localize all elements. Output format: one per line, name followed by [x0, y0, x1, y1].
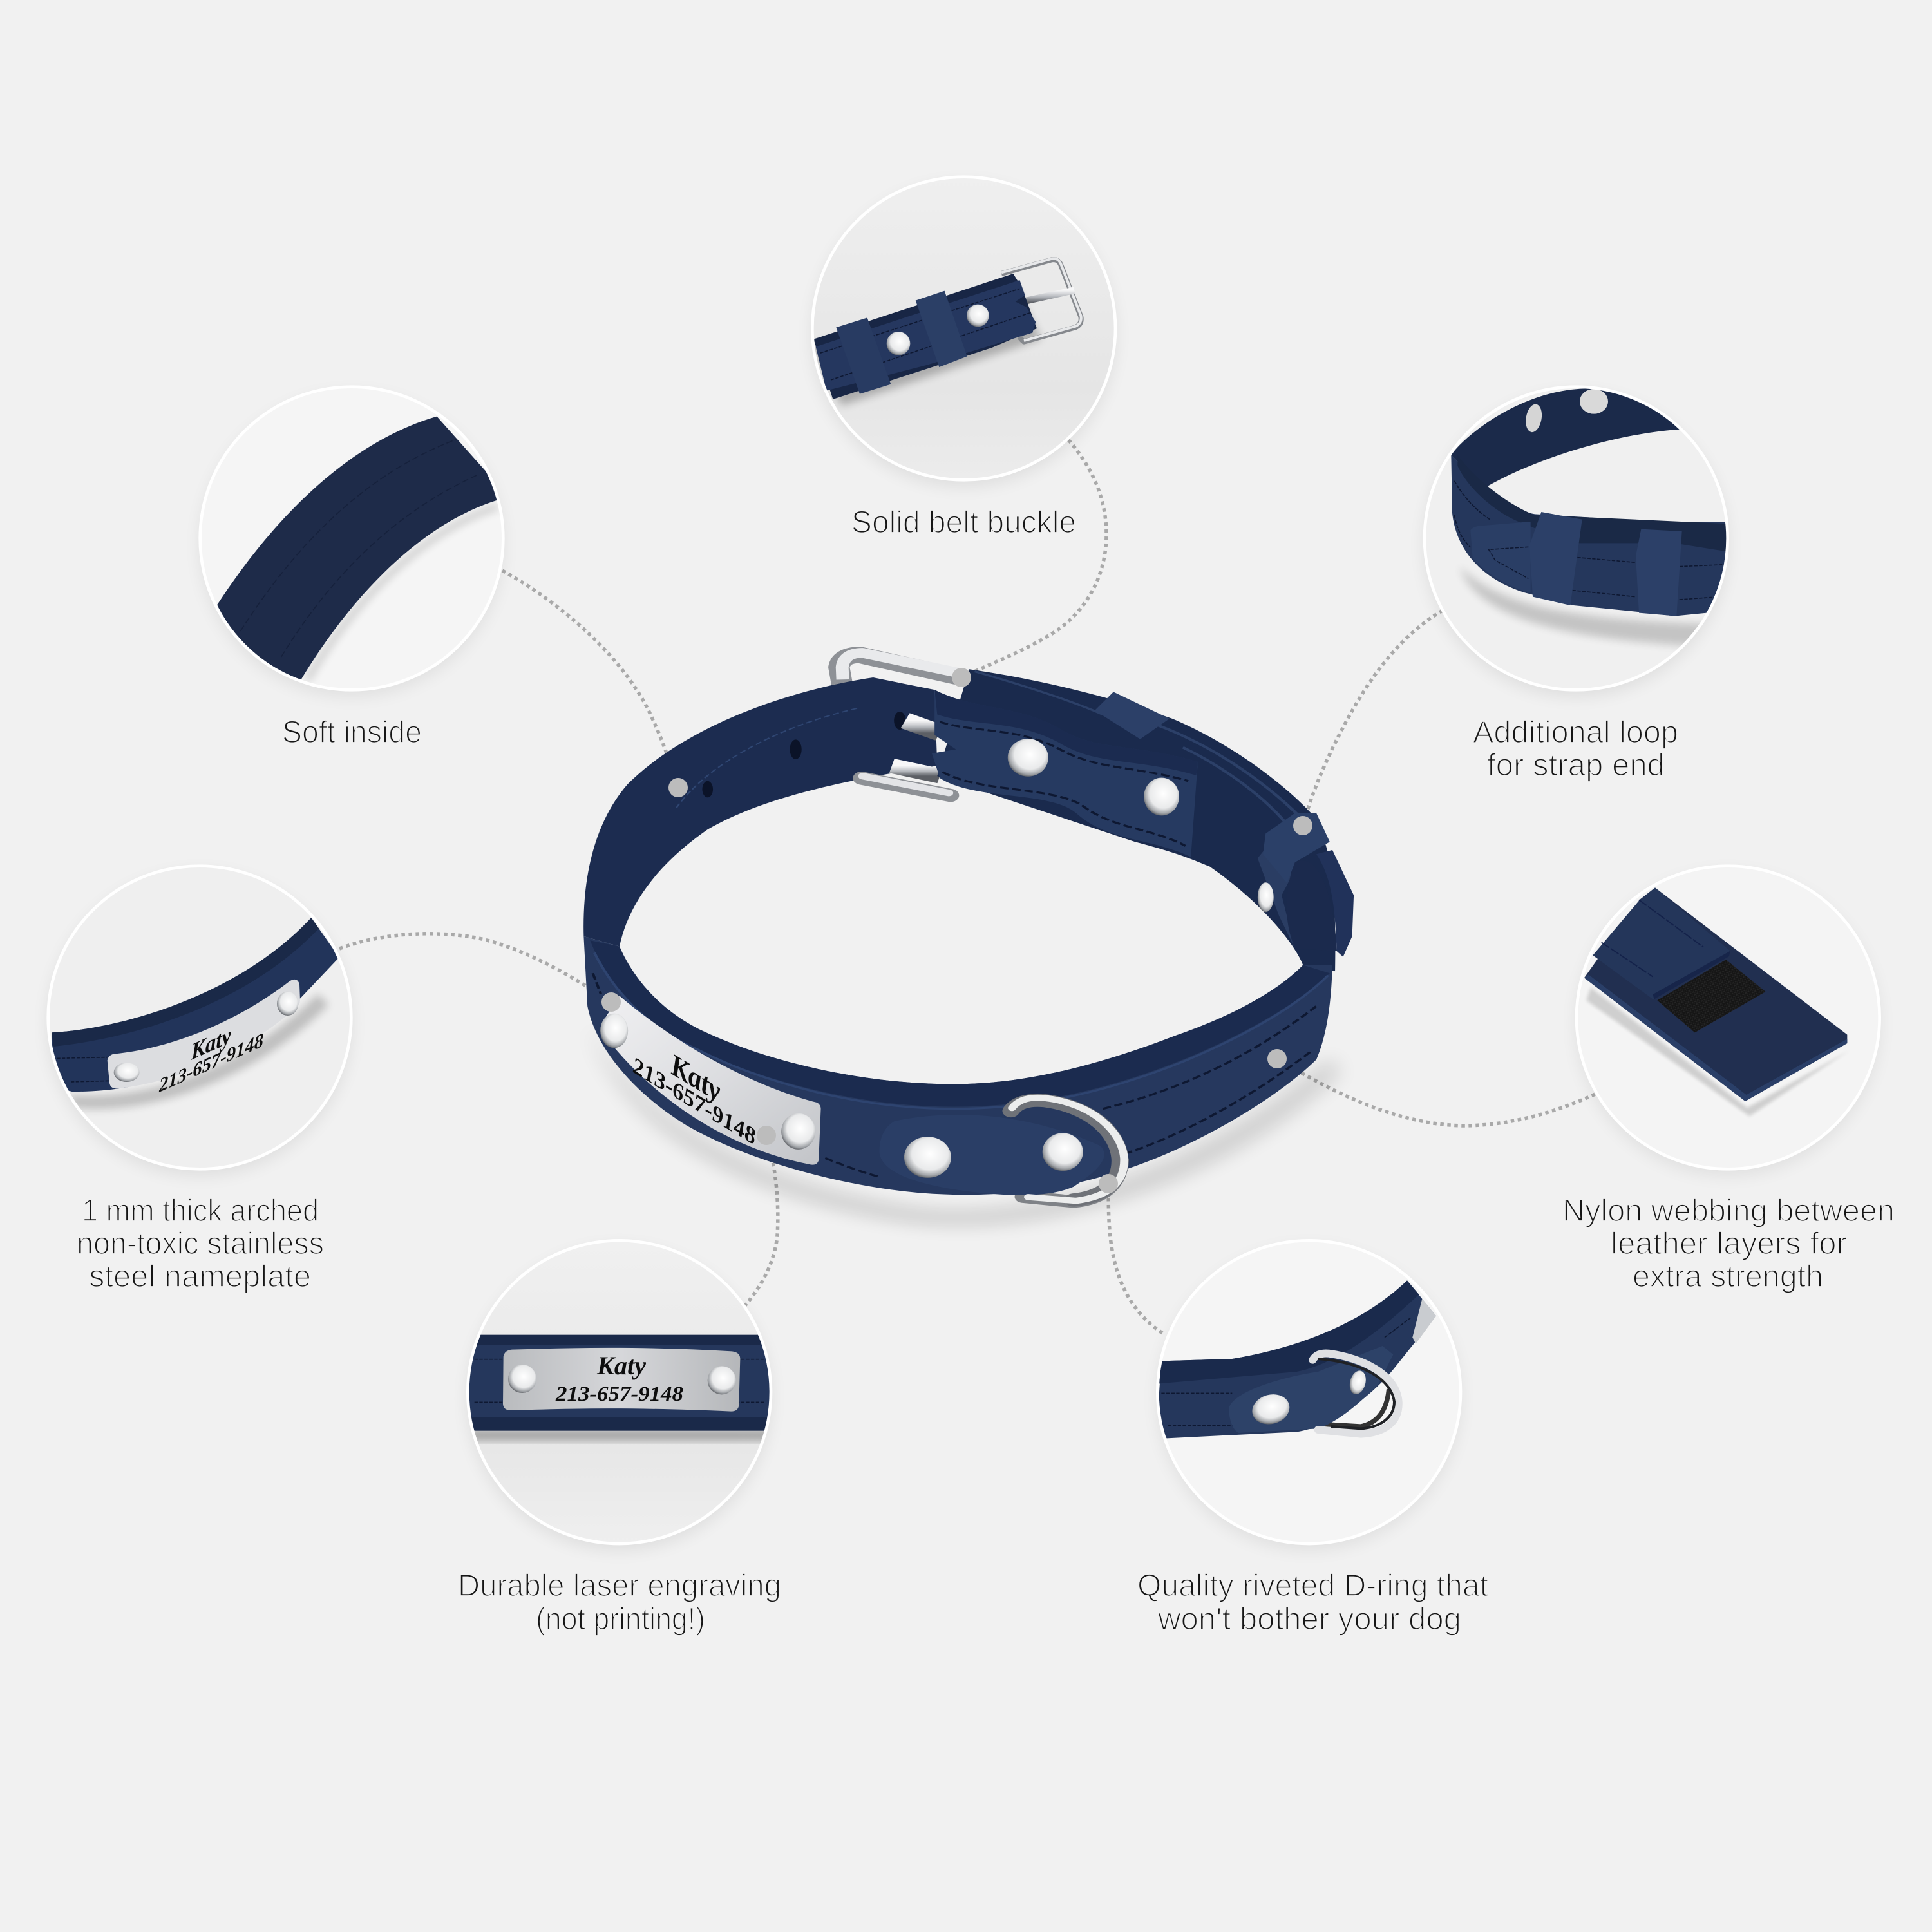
strap holes: [702, 712, 905, 797]
stitching: [1454, 481, 1726, 600]
leader line: additional loop: [1303, 611, 1443, 826]
label: nylon webbing: [1562, 1194, 1895, 1294]
panel: riveted D-ring: [1157, 1240, 1461, 1550]
buckle prong and lower bar: [862, 721, 951, 795]
stainless steel nameplate: [603, 996, 821, 1165]
nameplate engraving: Katy: [670, 1045, 721, 1110]
buckle tab rivets: [1008, 739, 1179, 815]
label: nylon webbing: Nylon webbing between: [1562, 1194, 1895, 1228]
buckle prong: [1018, 290, 1074, 303]
panel: arched nameplate: [48, 866, 351, 1175]
label: soft inside: Soft inside: [282, 715, 422, 750]
buckle strap: [813, 274, 1037, 399]
suede stitching: [240, 439, 457, 631]
buckle back frame: [839, 653, 961, 685]
collar shadow: [590, 1023, 1338, 1226]
stitching: [1161, 1392, 1232, 1395]
rivets: [887, 332, 910, 355]
suede top edge: [52, 918, 319, 1046]
D-ring: [1011, 1098, 1124, 1201]
strap base: [1584, 887, 1847, 1101]
arched nameplate engraving: 213-657-9148: [158, 1028, 263, 1097]
label: nameplate: non-toxic stainless: [77, 1227, 324, 1261]
tab rivets: [904, 1133, 1083, 1178]
rivets: [508, 1365, 536, 1393]
suede strap with holes: [1451, 388, 1683, 488]
nameplate corner: [1412, 1299, 1436, 1344]
leader line: nylon webbing: [1277, 1059, 1595, 1126]
suede stitching: [676, 708, 857, 809]
band: [52, 918, 339, 1092]
wavy buckle tab: [932, 690, 1198, 857]
buckle tab stitching: [940, 722, 1188, 846]
label: D-ring: Quality riveted D-ring that: [1137, 1569, 1488, 1603]
label: laser engraving: (not printing!): [536, 1602, 705, 1636]
panel: nylon webbing: [1577, 866, 1880, 1175]
nameplate engraving: 213-657-9148: [632, 1050, 755, 1151]
label: D-ring: [1137, 1569, 1488, 1636]
small keeper loop: [1095, 692, 1170, 739]
main collar illustration: [583, 653, 1354, 1226]
label: additional loop: for strap end: [1487, 748, 1665, 782]
label: additional loop: [1473, 715, 1678, 782]
suede inner strap, right: [937, 669, 1335, 971]
label: D-ring: won't bother your dog: [1157, 1602, 1461, 1636]
stitching: [820, 289, 1019, 353]
stitching: [475, 1358, 766, 1361]
panel: laser engraving: [466, 1240, 775, 1550]
label: nylon webbing: leather layers for: [1611, 1227, 1847, 1261]
front leather band: [583, 936, 1332, 1195]
keeper loops: [836, 317, 891, 394]
laser engraving text: Katy: [596, 1351, 646, 1380]
leader line: nameplate: [339, 934, 611, 1002]
lip highlight: [594, 952, 1328, 1109]
leather band: [1451, 455, 1728, 616]
nameplate: [108, 980, 300, 1088]
label: nameplate: 1 mm thick arched: [82, 1194, 319, 1228]
panel: solid belt buckle: [811, 177, 1115, 486]
top leather layer: [1593, 887, 1730, 999]
upper fold of the buckle tab: [934, 690, 1198, 775]
leader line: soft inside: [502, 571, 677, 787]
D-ring: [1312, 1353, 1399, 1434]
label: nameplate: [77, 1194, 324, 1294]
buckle frame: [1001, 258, 1081, 342]
nylon webbing: [1657, 960, 1766, 1032]
stitching: [1639, 900, 1703, 947]
panel: additional loop: [1425, 387, 1728, 696]
laser engraving text: [555, 1351, 683, 1406]
rivets: [114, 1063, 140, 1082]
leader line: laser engraving: [745, 1135, 778, 1305]
label: solid belt buckle: Solid belt buckle: [851, 506, 1076, 540]
suede lip: [1159, 1280, 1419, 1383]
layered strap edges: [974, 671, 1300, 821]
laser engraving text: 213-657-9148: [555, 1383, 683, 1406]
front band stitching: [592, 973, 1316, 1177]
D-ring back: [1325, 1389, 1389, 1426]
plate: [503, 1348, 740, 1412]
nameplate rivets: [600, 1014, 815, 1150]
tab: [1229, 1346, 1393, 1433]
label: laser engraving: Durable laser engraving: [458, 1569, 781, 1603]
stitching: [57, 1057, 108, 1058]
arched nameplate engraving: Katy: [191, 1022, 231, 1066]
suede inner strap, left: [583, 677, 937, 947]
band: [1157, 1280, 1436, 1438]
leader line: D-ring: [1108, 1184, 1162, 1333]
D-ring rear section: [1023, 1160, 1121, 1202]
strap end tip: [1470, 522, 1531, 592]
suede strap: [208, 417, 509, 681]
label: additional loop: Additional loop: [1473, 715, 1678, 750]
panel: soft inside: [200, 387, 509, 696]
strap end loop: [1258, 813, 1354, 957]
suede lip on the front band: [590, 940, 1330, 1107]
anchor dots: [601, 668, 1312, 1193]
loops: [1530, 512, 1582, 605]
upper lip: [1457, 455, 1728, 552]
leader line: solid belt buckle: [961, 440, 1106, 677]
label: nameplate: steel nameplate: [89, 1260, 311, 1294]
rivets: [1249, 1390, 1293, 1428]
label: laser engraving: [458, 1569, 781, 1636]
label: nylon webbing: extra strength: [1633, 1260, 1823, 1294]
riveted front tab: [880, 1115, 1104, 1195]
band: [466, 1335, 775, 1431]
